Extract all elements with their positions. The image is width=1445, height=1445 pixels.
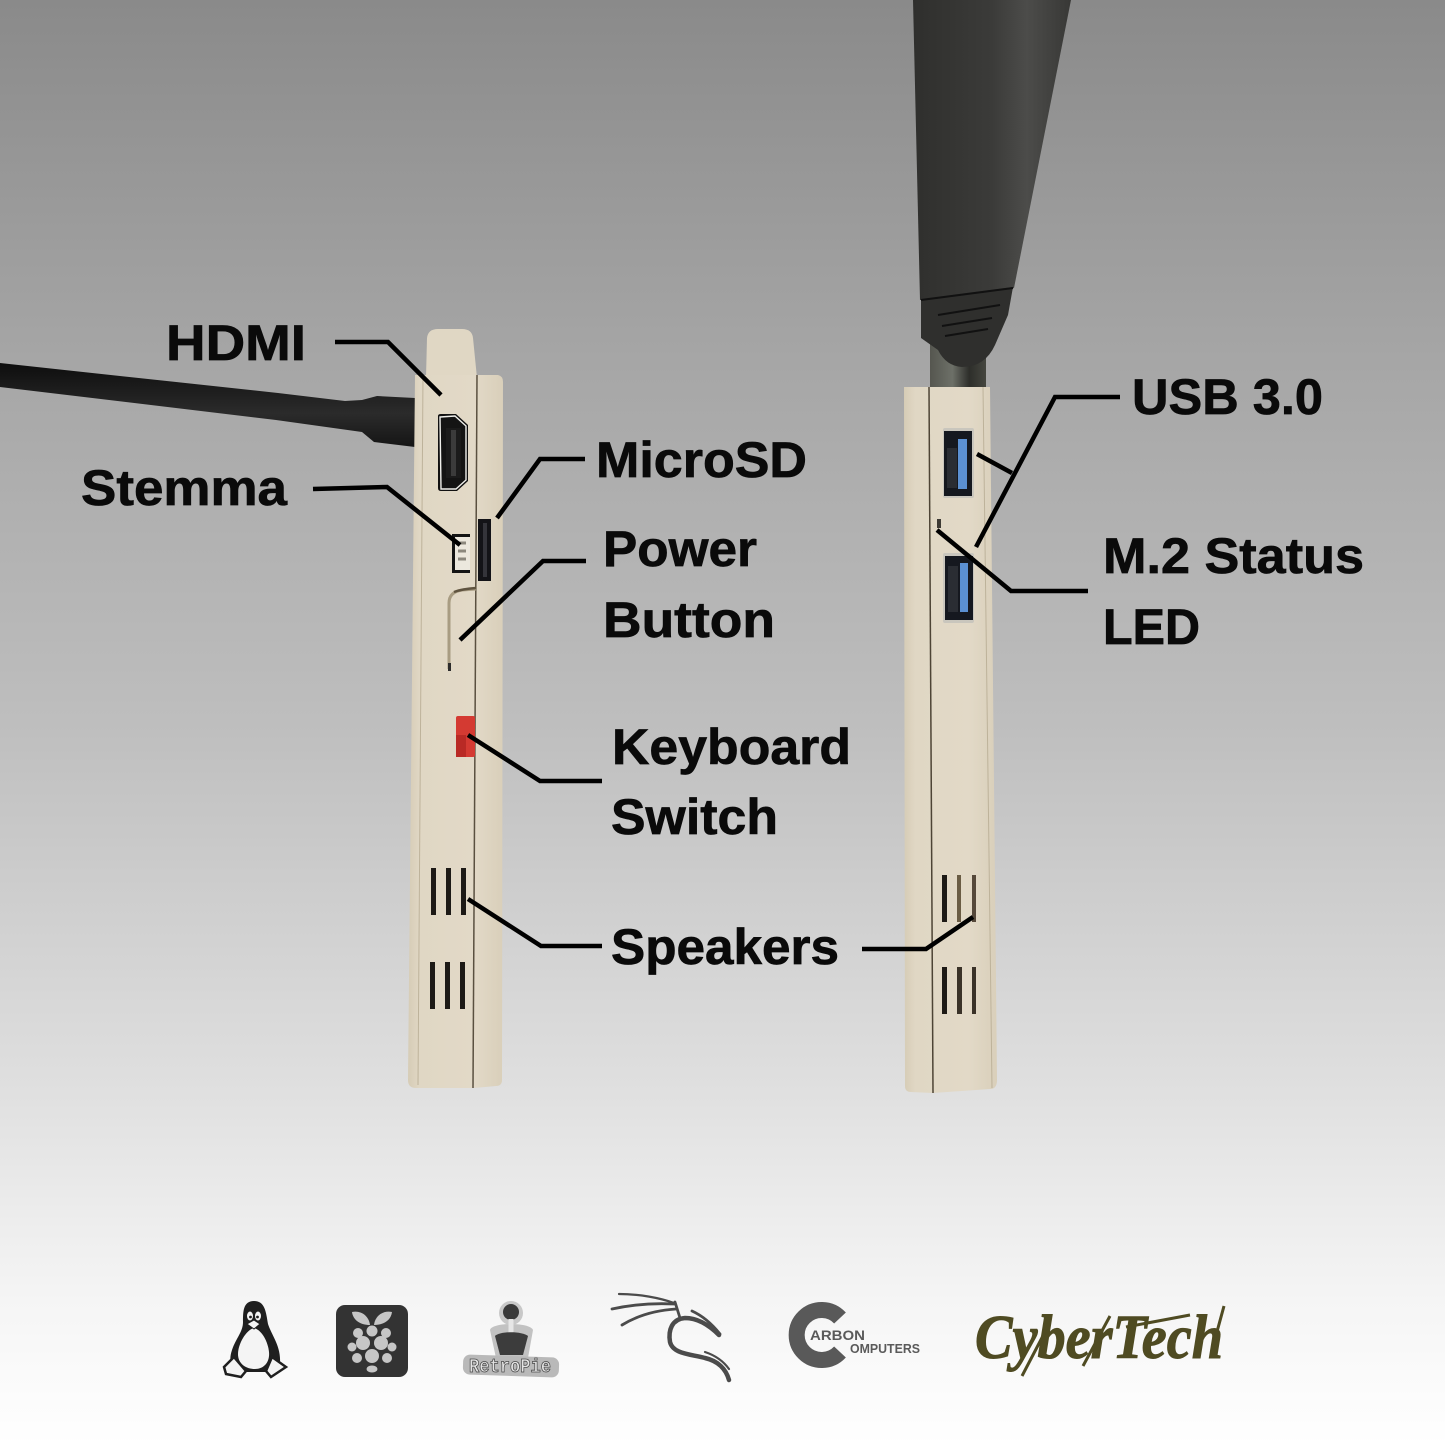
icon: RetroPie: RetroPie bbox=[469, 1356, 551, 1378]
port: MicroSD bbox=[478, 519, 491, 581]
callout: USB 3.0 bbox=[976, 369, 1323, 547]
logo: Carbon Computers: OMPUTERS bbox=[850, 1342, 920, 1356]
antenna bbox=[913, 0, 1071, 389]
callout: M.2 Status LED: LED bbox=[1103, 599, 1200, 655]
logo: Carbon Computers bbox=[797, 1310, 920, 1360]
icon: Raspberry Pi bbox=[336, 1305, 408, 1377]
speaker slots bbox=[430, 868, 466, 1009]
callout: M.2 Status LED bbox=[937, 528, 1364, 655]
device: left side view bbox=[408, 329, 503, 1088]
logo: Carbon Computers: ARBON bbox=[810, 1327, 865, 1343]
callout: USB 3.0: USB 3.0 bbox=[1132, 369, 1323, 425]
callout: Power Button: Button bbox=[603, 592, 775, 648]
tab bbox=[426, 329, 477, 378]
HDMI cable bbox=[0, 363, 415, 447]
logo: CyberTech: CyberTech bbox=[975, 1304, 1223, 1372]
port: HDMI bbox=[438, 414, 468, 491]
icon: RetroPie bbox=[463, 1301, 559, 1378]
callout: Stemma: Stemma bbox=[81, 460, 288, 516]
callout: Speakers: Speakers bbox=[611, 919, 839, 975]
callout: Keyboard Switch bbox=[468, 719, 851, 845]
callout: HDMI bbox=[166, 315, 441, 395]
port: USB 3.0 lower bbox=[943, 553, 974, 623]
icon: Linux penguin bbox=[224, 1301, 286, 1377]
callout: MicroSD: MicroSD bbox=[596, 432, 807, 488]
callout: HDMI: HDMI bbox=[166, 315, 306, 371]
port: USB 3.0 upper bbox=[943, 428, 974, 498]
callout: Power Button: Power bbox=[603, 521, 757, 577]
keyboard switch bbox=[456, 716, 475, 757]
body bbox=[408, 375, 503, 1088]
icon: Kali dragon bbox=[612, 1294, 729, 1380]
callout: MicroSD bbox=[497, 432, 807, 518]
port: Stemma bbox=[452, 534, 470, 573]
callout: Power Button bbox=[460, 521, 775, 648]
device: right side view bbox=[904, 387, 997, 1093]
callout: Keyboard Switch: Switch bbox=[611, 789, 778, 845]
callout: M.2 Status LED: M.2 Status bbox=[1103, 528, 1364, 584]
power button bbox=[448, 588, 476, 671]
callout: Keyboard Switch: Keyboard bbox=[612, 719, 851, 775]
callout: Stemma bbox=[81, 460, 460, 545]
M.2 status LED bbox=[937, 519, 941, 528]
callout: Speakers bbox=[468, 899, 973, 975]
speaker slots bbox=[942, 875, 976, 1014]
